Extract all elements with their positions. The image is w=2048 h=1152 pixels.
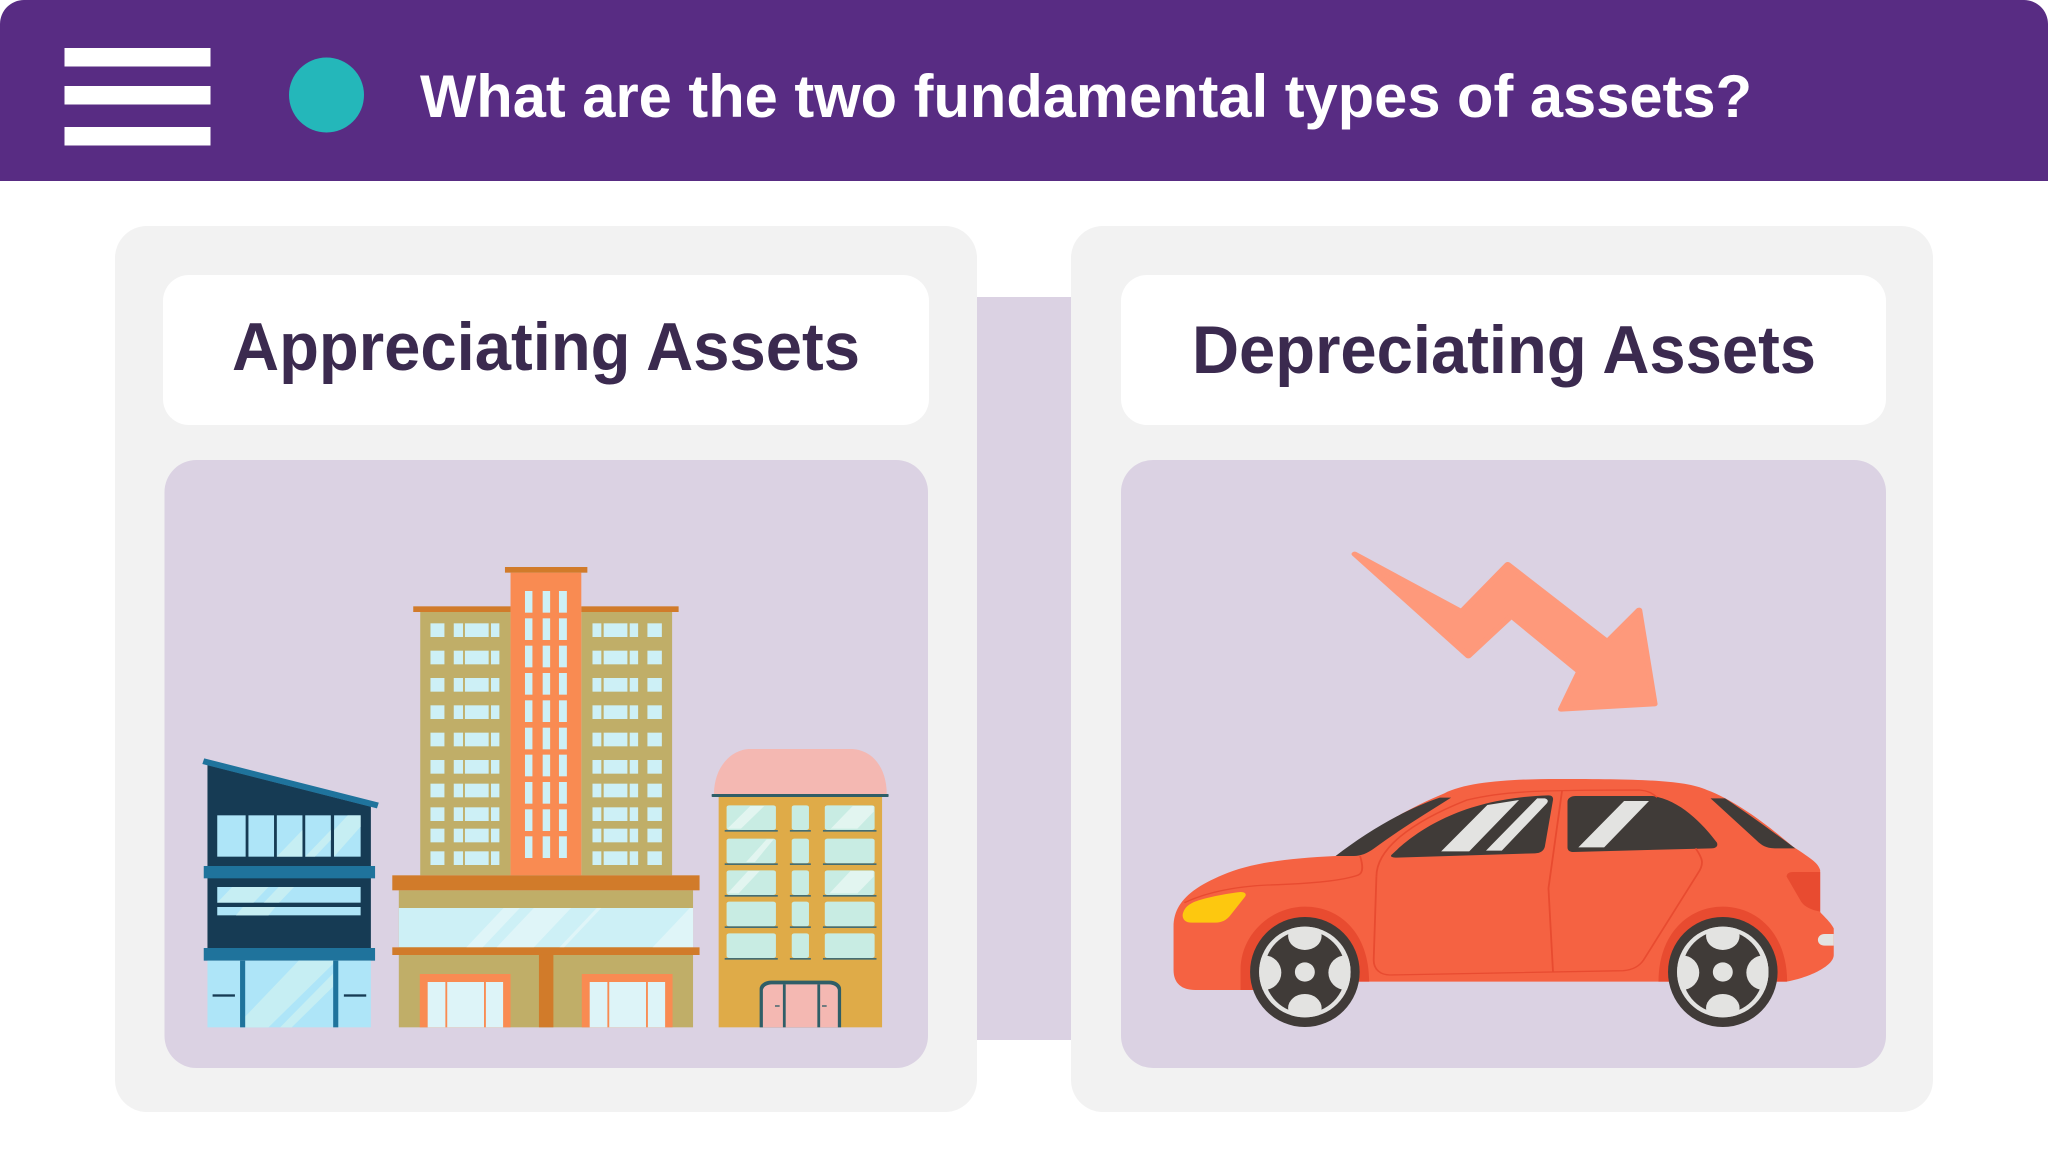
panel: appreciating assets <box>115 226 977 1112</box>
image panel: car and falling arrow <box>1121 460 1886 1068</box>
icon: navy building <box>202 758 379 1027</box>
header bar <box>0 0 2048 181</box>
heading: appreciating assets <box>163 275 929 425</box>
heading: depreciating assets <box>1121 275 1886 425</box>
icon: red car <box>1174 779 1834 1027</box>
icon: yellow building <box>712 749 889 1027</box>
icon: front wheel <box>1247 917 1363 1027</box>
heading: depreciating assets: Depreciating Assets <box>1192 312 1816 388</box>
heading: appreciating assets: Appreciating Assets <box>232 309 860 385</box>
icon: teal circle <box>289 58 364 132</box>
panel: depreciating assets <box>1071 226 1933 1112</box>
icon: rear wheel <box>1665 917 1781 1027</box>
image panel: buildings <box>164 460 928 1068</box>
icon: falling arrow <box>1355 554 1654 709</box>
icon: central tower building <box>392 567 700 1027</box>
connector between panels <box>977 297 1071 1040</box>
title: What are the two fundamental types of assets? <box>420 63 1752 130</box>
icon: menu bars <box>64 48 210 146</box>
